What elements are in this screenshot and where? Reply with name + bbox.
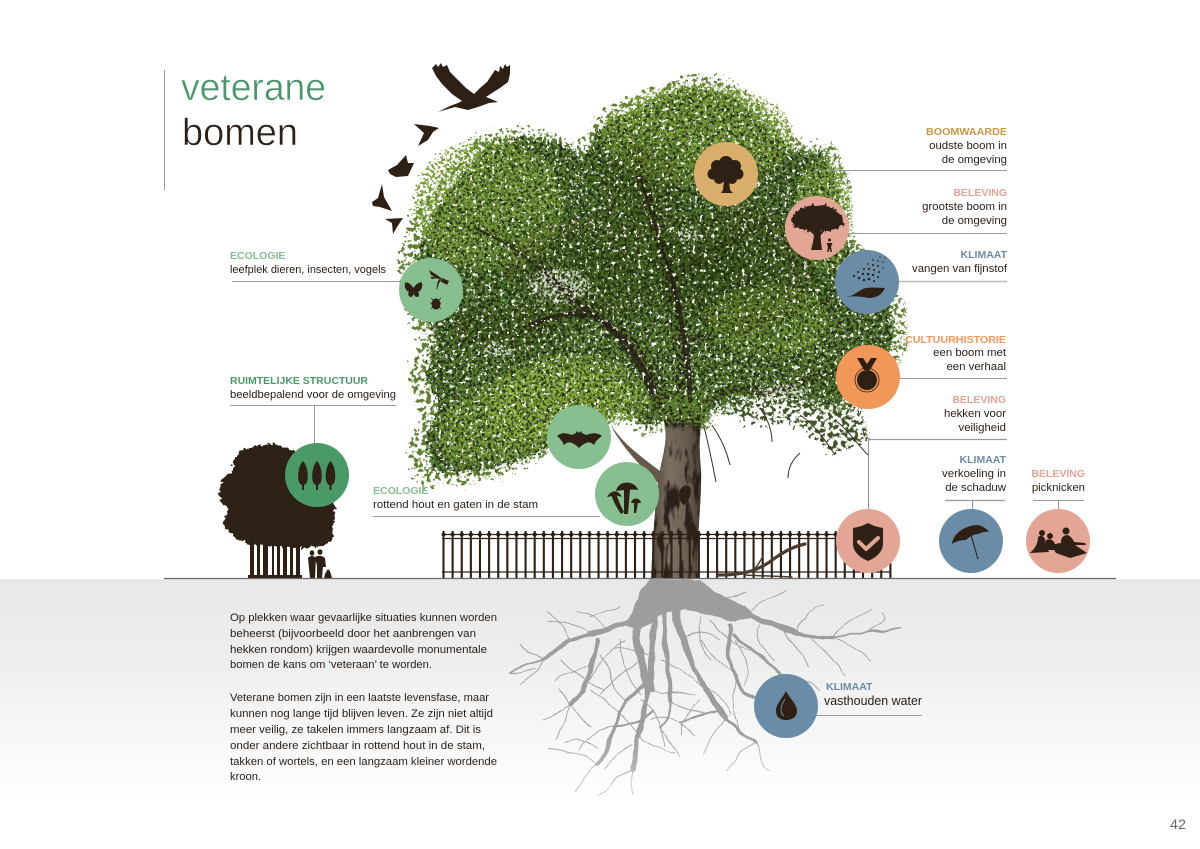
callout: ruimtelijke structuur: beeldbepalend voor de omgeving xyxy=(230,389,396,401)
callout: cultuurhistorie xyxy=(905,334,1007,373)
callout: klimaat schaduw: de schaduw xyxy=(945,482,1007,494)
callout: cultuurhistorie: een boom met xyxy=(933,347,1007,359)
callout: ecologie leefplek: leefplek dieren, insecten, vogels xyxy=(230,264,386,276)
fence spear tips xyxy=(444,533,890,536)
callout: cultuurhistorie: een verhaal xyxy=(946,361,1006,373)
dark crown interior shade xyxy=(430,130,845,360)
callout: beleving grootste boom xyxy=(922,187,1007,227)
callout: beleving picknicken: BELEVING xyxy=(1031,468,1085,480)
intro paragraph: hekken rondom) krijgen waardevolle monumentale xyxy=(230,644,487,656)
callout: ecologie leefplek: ECOLOGIE xyxy=(230,250,285,262)
main limbs xyxy=(455,150,835,425)
icon: mushroom circle xyxy=(595,462,659,526)
icon: biggest tree circle xyxy=(785,196,849,260)
callout: klimaat fijnstof xyxy=(912,249,1008,275)
callout: beleving hekken: veiligheid xyxy=(958,422,1006,434)
callout: beleving grootste boom: de omgeving xyxy=(942,215,1007,227)
main right root xyxy=(745,612,795,632)
icon: umbrella circle xyxy=(939,509,1003,573)
callout: boomwaarde: BOOMWAARDE xyxy=(926,126,1007,138)
second paragraph: onder andere zichtbaar in rottend hout in de stam, xyxy=(230,740,485,752)
callout: ruimtelijke structuur: RUIMTELIJKE STRUCTUUR xyxy=(230,375,368,387)
second paragraph: Veterane bomen zijn in een laatste levensfase, maar xyxy=(230,692,489,704)
white blossoms xyxy=(408,80,903,480)
fence pickets xyxy=(444,531,890,578)
icon: large bird xyxy=(432,63,510,112)
bright extra leaves lower-left xyxy=(490,369,633,439)
icon: fine dust circle xyxy=(835,250,899,314)
callout: ecologie rottend hout: ECOLOGIE xyxy=(373,485,428,497)
ground line xyxy=(164,578,1116,580)
callout: klimaat fijnstof: vangen van fijnstof xyxy=(912,263,1008,275)
icon: cypress trees circle xyxy=(285,443,349,507)
icon: picnic circle xyxy=(1026,509,1090,573)
icon: water drop circle xyxy=(754,674,818,738)
second paragraph xyxy=(230,692,497,783)
main downward roots xyxy=(637,612,647,683)
callout: boomwaarde: de omgeving xyxy=(942,154,1007,166)
callout: ecologie leefplek xyxy=(230,250,386,276)
callout: beleving picknicken: picknicken xyxy=(1032,482,1085,494)
callout: klimaat schaduw xyxy=(942,454,1007,494)
fence xyxy=(442,531,890,578)
page number: 42 xyxy=(1170,816,1186,832)
main left root xyxy=(590,620,635,634)
callout: beleving grootste boom: grootste boom in xyxy=(922,201,1007,213)
intro paragraph: beheerst (bijvoorbeeld door het aanbrengen van xyxy=(230,628,476,640)
tree crown and trunk xyxy=(401,74,911,579)
icon: small bird 4 xyxy=(385,218,403,234)
flock of birds xyxy=(372,63,510,234)
visible limbs through leaves xyxy=(475,175,690,405)
callout: klimaat schaduw: KLIMAAT xyxy=(960,454,1007,466)
title word: veterane: veterane xyxy=(181,67,326,109)
icon: small bird 1 xyxy=(414,124,439,146)
fuzzy outer foliage xyxy=(401,74,911,486)
gaps below crown around the branch xyxy=(622,424,665,460)
foliage above the trunk xyxy=(650,392,715,428)
callout: ecologie rottend hout xyxy=(373,485,538,511)
callout: klimaat schaduw: verkoeling in xyxy=(942,468,1006,480)
roots xyxy=(510,579,900,795)
title block xyxy=(164,67,326,190)
intro paragraph: bomen de kans om ‘veteraan’ te worden. xyxy=(230,659,432,671)
callout: ecologie rottend hout: rottend hout en gaten in de stam xyxy=(373,499,538,511)
icon: shield circle xyxy=(836,509,900,573)
silhouette crown xyxy=(219,443,335,548)
sparse lower right foliage and twigs xyxy=(702,395,872,482)
icon: bat circle xyxy=(547,405,611,469)
callout: beleving hekken: BELEVING xyxy=(952,394,1006,406)
callout: boomwaarde xyxy=(926,126,1007,166)
light green foliage highlights xyxy=(415,85,853,465)
fence rails xyxy=(442,534,890,572)
root crown xyxy=(624,579,757,630)
callout: beleving hekken: hekken voor xyxy=(944,408,1006,420)
icon: small bird 3 xyxy=(372,184,392,211)
fallen branch xyxy=(719,544,805,577)
mid green foliage xyxy=(415,86,895,474)
trunk xyxy=(651,418,702,579)
icon: insects circle xyxy=(399,258,463,322)
silhouette tree with people xyxy=(219,443,335,579)
callout: boomwaarde: oudste boom in xyxy=(929,140,1007,152)
second paragraph: takken of wortels, en een langzaam kleiner wordende xyxy=(230,756,497,768)
second paragraph: kunnen nog lange tijd blijven leven. Ze zijn niet altijd xyxy=(230,708,493,720)
callout: klimaat water: KLIMAAT xyxy=(826,681,873,693)
second paragraph: meer veilig, ze takelen immers langzaam af. Dit is xyxy=(230,724,481,736)
callout: beleving hekken xyxy=(944,394,1006,434)
fine roots xyxy=(510,590,885,795)
callout: beleving picknicken xyxy=(1031,468,1085,494)
soil background xyxy=(0,579,1200,849)
branch to lower left xyxy=(611,426,664,487)
callout: beleving grootste boom: BELEVING xyxy=(953,187,1007,199)
icon: medal circle xyxy=(836,345,900,409)
callout: klimaat fijnstof: KLIMAAT xyxy=(961,249,1008,261)
people and dog xyxy=(308,549,332,578)
title word: bomen: bomen xyxy=(182,112,298,154)
icon: tree value circle xyxy=(694,142,758,206)
callout: ruimtelijke structuur xyxy=(230,375,396,401)
second paragraph: kroon. xyxy=(230,771,261,783)
callout: cultuurhistorie: CULTUURHISTORIE xyxy=(905,334,1006,346)
intro paragraph xyxy=(230,612,497,671)
white sky gaps in the crown xyxy=(485,225,811,400)
callout: klimaat water xyxy=(824,681,922,708)
callout: klimaat water: vasthouden water xyxy=(824,694,922,708)
crown base foliage xyxy=(418,88,893,472)
callout lines on the right xyxy=(230,170,1084,716)
icon: small bird 2 xyxy=(388,155,414,177)
intro paragraph: Op plekken waar gevaarlijke situaties kunnen worden xyxy=(230,612,497,624)
trunk cavity xyxy=(679,486,691,505)
silhouette trunks xyxy=(248,535,302,579)
